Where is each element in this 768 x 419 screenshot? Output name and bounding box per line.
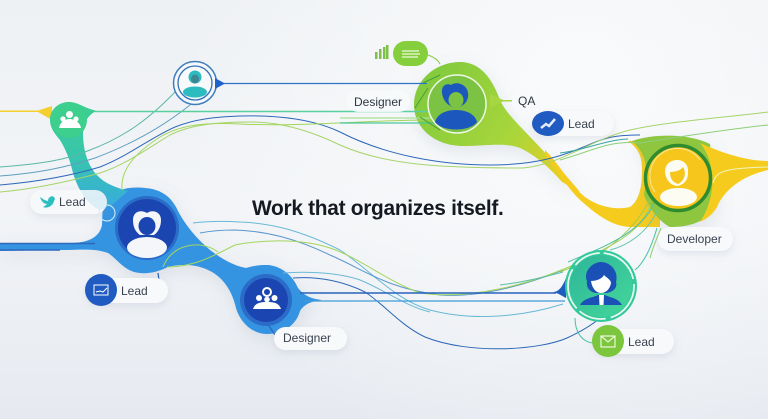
node: lead blue avatar — [115, 196, 179, 260]
yellow line left of team node — [0, 106, 52, 120]
icon: team — [59, 111, 81, 128]
icon: bar chart — [375, 45, 388, 59]
chart and menu pill — [375, 41, 440, 66]
icon: team — [253, 288, 281, 309]
connection lines — [0, 92, 768, 349]
label: developer — [658, 227, 733, 251]
icon: person — [580, 262, 622, 305]
icon: person — [127, 211, 167, 258]
green stem from team node to blue node — [50, 102, 128, 210]
icon: person — [183, 70, 207, 98]
label: lead mail: Lead — [628, 335, 655, 349]
label: designer top: Designer — [354, 95, 402, 109]
node: lead teal avatar — [553, 250, 637, 322]
node: team — [51, 102, 87, 138]
icon: bird — [40, 196, 55, 208]
yellow flow — [545, 140, 660, 227]
label: designer top — [347, 90, 410, 112]
developer right tail — [700, 143, 768, 222]
label: developer: Developer — [667, 232, 722, 246]
label: lead chart — [85, 274, 168, 306]
icon: person — [660, 160, 697, 206]
lines into designer node — [95, 75, 440, 130]
pill — [393, 41, 428, 66]
node: developer — [646, 146, 710, 210]
node: designer green — [428, 75, 512, 133]
icon: mail — [601, 336, 615, 347]
icon: person — [435, 83, 477, 130]
designer node blob — [414, 62, 580, 192]
label: designer bottom — [274, 327, 347, 350]
icon: link — [541, 119, 555, 128]
label: lead twitter: Lead — [59, 195, 86, 209]
label: lead twitter — [30, 190, 115, 221]
left blue lines — [0, 244, 95, 250]
label: lead mail — [592, 325, 674, 357]
icon: screen — [94, 285, 108, 295]
label: designer bottom: Designer — [283, 331, 331, 345]
node: top avatar — [174, 62, 225, 104]
top avatar line — [216, 82, 427, 84]
label: lead link — [532, 111, 614, 136]
node: designer blue — [240, 274, 292, 326]
label: lead chart: Lead — [121, 284, 148, 298]
blue flow — [0, 188, 322, 334]
label: QA — [512, 90, 542, 112]
developer green blob — [632, 136, 717, 227]
right blue lines — [300, 293, 565, 301]
title: Work that organizes itself. — [252, 197, 504, 220]
label: lead link: Lead — [568, 117, 595, 131]
label: QA: QA — [518, 94, 535, 108]
